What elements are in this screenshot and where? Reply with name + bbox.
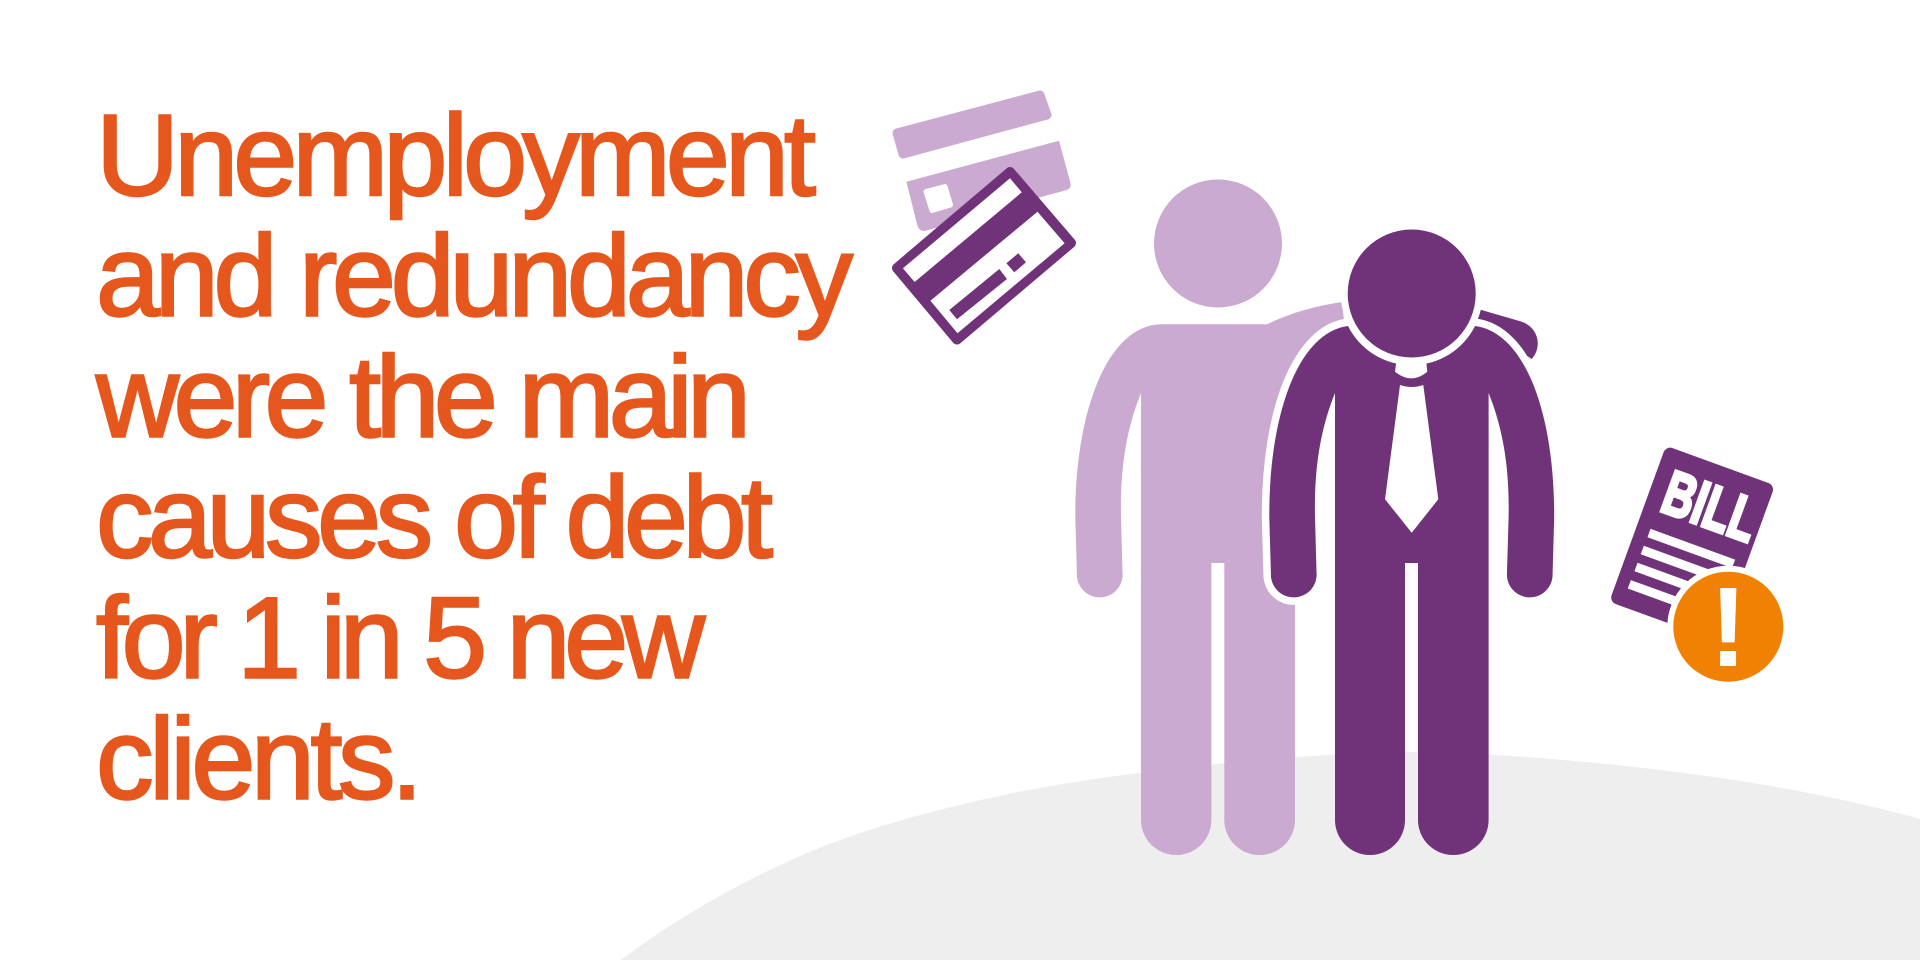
title xyxy=(95,92,854,824)
light figure xyxy=(1075,180,1345,855)
hand on shoulder xyxy=(1478,309,1538,359)
icon: overdue bill: ! xyxy=(1709,564,1747,690)
icon: overdue bill xyxy=(1609,446,1789,690)
icon: overdue bill: BILL xyxy=(1654,458,1767,556)
title: causes of debt xyxy=(96,454,773,582)
title: and redundancy xyxy=(96,212,854,340)
title: for 1 in 5 new xyxy=(96,574,706,702)
icon: dark credit card xyxy=(897,172,1071,340)
grey ground curve xyxy=(621,752,1920,960)
title: clients. xyxy=(96,696,423,824)
dark figure with tie xyxy=(1269,222,1554,855)
title: Unemployment xyxy=(96,92,816,220)
icon: light credit card xyxy=(897,95,1071,231)
title: were the main xyxy=(95,334,751,462)
